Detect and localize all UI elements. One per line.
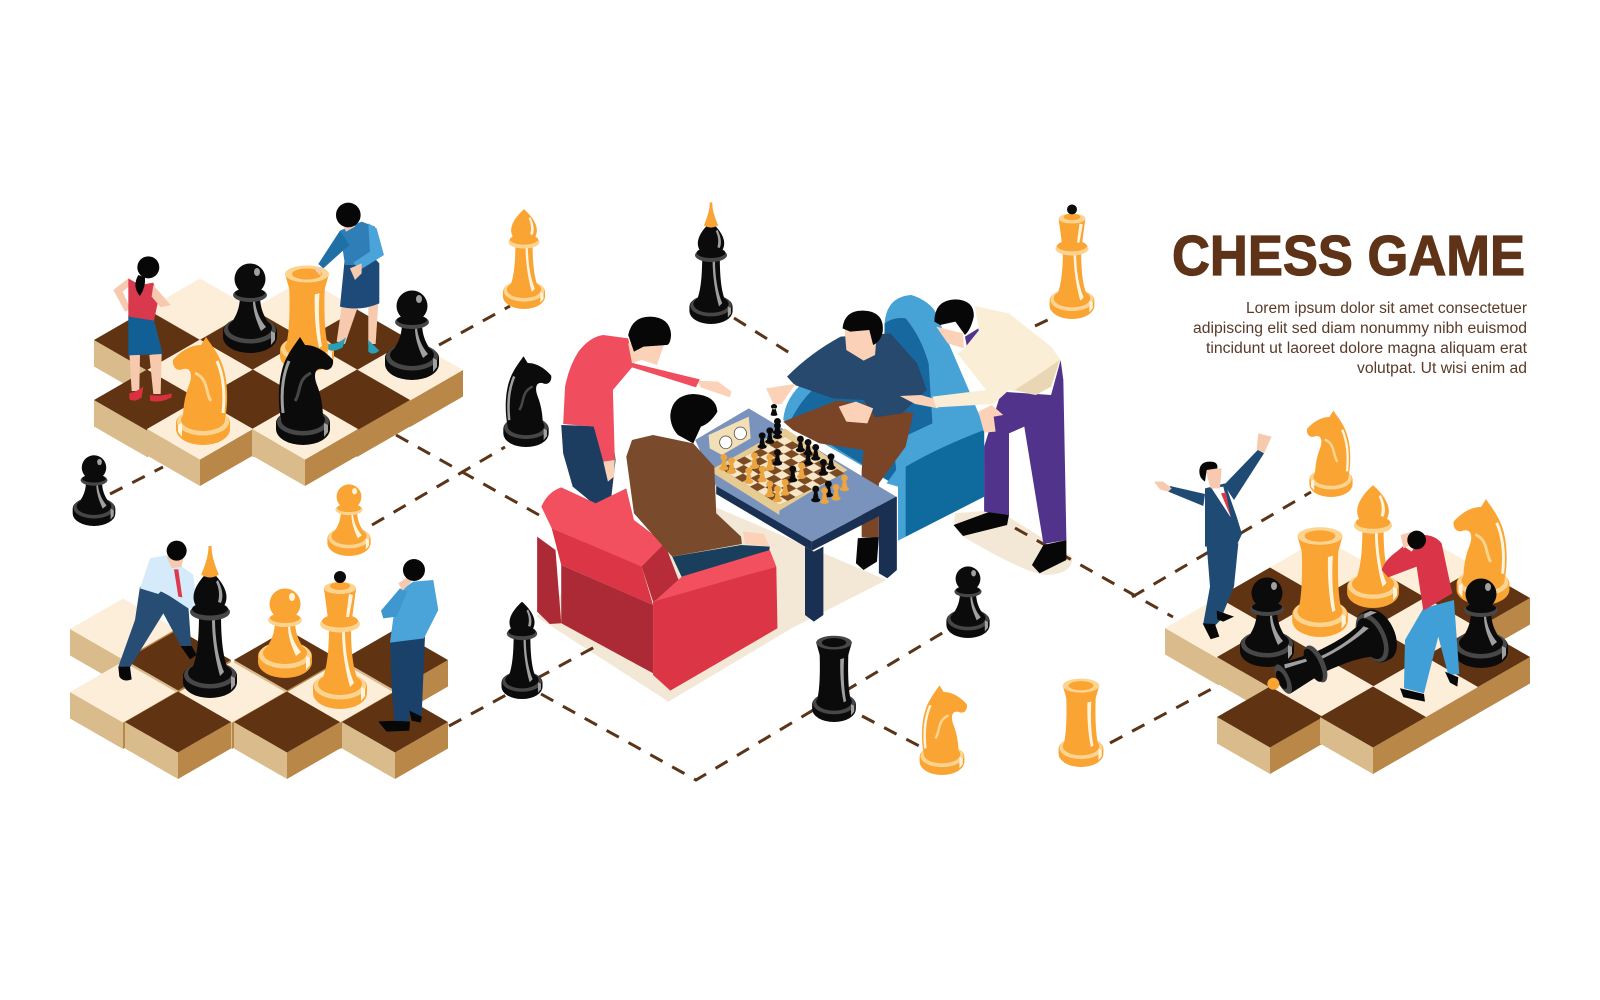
red armchair xyxy=(537,487,682,673)
dashed connector lines xyxy=(110,306,1311,780)
orange knight bottom xyxy=(920,685,967,775)
man in blue shirt thinking xyxy=(378,559,438,732)
black pawn right xyxy=(385,290,439,380)
black rook xyxy=(812,636,856,722)
description text: tincidunt ut laoreet dolore magna aliquam erat xyxy=(1206,340,1528,357)
description text: volutpat. Ut wisi enim ad xyxy=(1357,360,1527,377)
black pawn right of centre xyxy=(946,566,990,638)
man in cream shirt pointing xyxy=(900,299,1066,573)
orange rook xyxy=(280,266,334,372)
black pawn left xyxy=(1240,578,1294,667)
black pawn left xyxy=(73,455,115,526)
orange knight xyxy=(173,337,230,445)
black bishop with orange tip xyxy=(689,202,733,324)
orange bishop top xyxy=(503,209,545,309)
floor rugs xyxy=(536,507,1072,702)
fallen black queen xyxy=(1257,604,1404,711)
description text: adipiscing elit sed diam nonummy nibh euismod xyxy=(1193,320,1527,337)
description text xyxy=(1193,300,1528,377)
mini black pieces xyxy=(758,418,836,502)
black pawn xyxy=(223,264,277,353)
orange bishop xyxy=(1347,485,1399,608)
black pawn right xyxy=(1454,578,1508,668)
orange pawn xyxy=(327,484,371,556)
orange rook bottom xyxy=(1059,679,1103,767)
orange rook xyxy=(1292,527,1348,637)
description text: Lorem ipsum dolor sit amet consectetuer xyxy=(1246,300,1527,317)
panel: top left board xyxy=(94,203,463,486)
woman in blue blouse xyxy=(315,203,384,354)
orange knight xyxy=(1453,499,1509,605)
man in red shirt standing xyxy=(561,317,732,504)
woman in red top xyxy=(113,256,172,401)
orange pawn xyxy=(258,588,312,678)
panel: lower left board xyxy=(70,541,448,779)
board tiles xyxy=(94,278,463,486)
black knight xyxy=(276,337,333,445)
black knight xyxy=(503,356,551,447)
title: CHESS GAME xyxy=(1172,224,1525,288)
man in white shirt pushing bishop xyxy=(118,541,197,681)
board tiles xyxy=(1165,538,1530,774)
chessboard xyxy=(714,428,847,515)
black bishop xyxy=(183,546,237,698)
man in navy sweater xyxy=(766,311,927,570)
orange queen top xyxy=(1050,204,1094,319)
orange knight right xyxy=(1307,411,1353,497)
board tiles xyxy=(70,598,448,779)
panel: right board xyxy=(1154,433,1530,774)
mini orange pieces xyxy=(719,452,849,504)
man in brown jacket seated xyxy=(626,394,777,691)
man in red sweater holding head xyxy=(1382,531,1459,702)
black bishop xyxy=(501,602,543,699)
centre scene: players around table xyxy=(537,295,1066,691)
orange queen xyxy=(313,571,367,709)
chess clock xyxy=(709,417,751,455)
standalone chess pieces xyxy=(73,202,1353,775)
table xyxy=(695,408,897,622)
man in suit celebrating xyxy=(1154,433,1272,639)
blue armchair xyxy=(783,295,984,541)
